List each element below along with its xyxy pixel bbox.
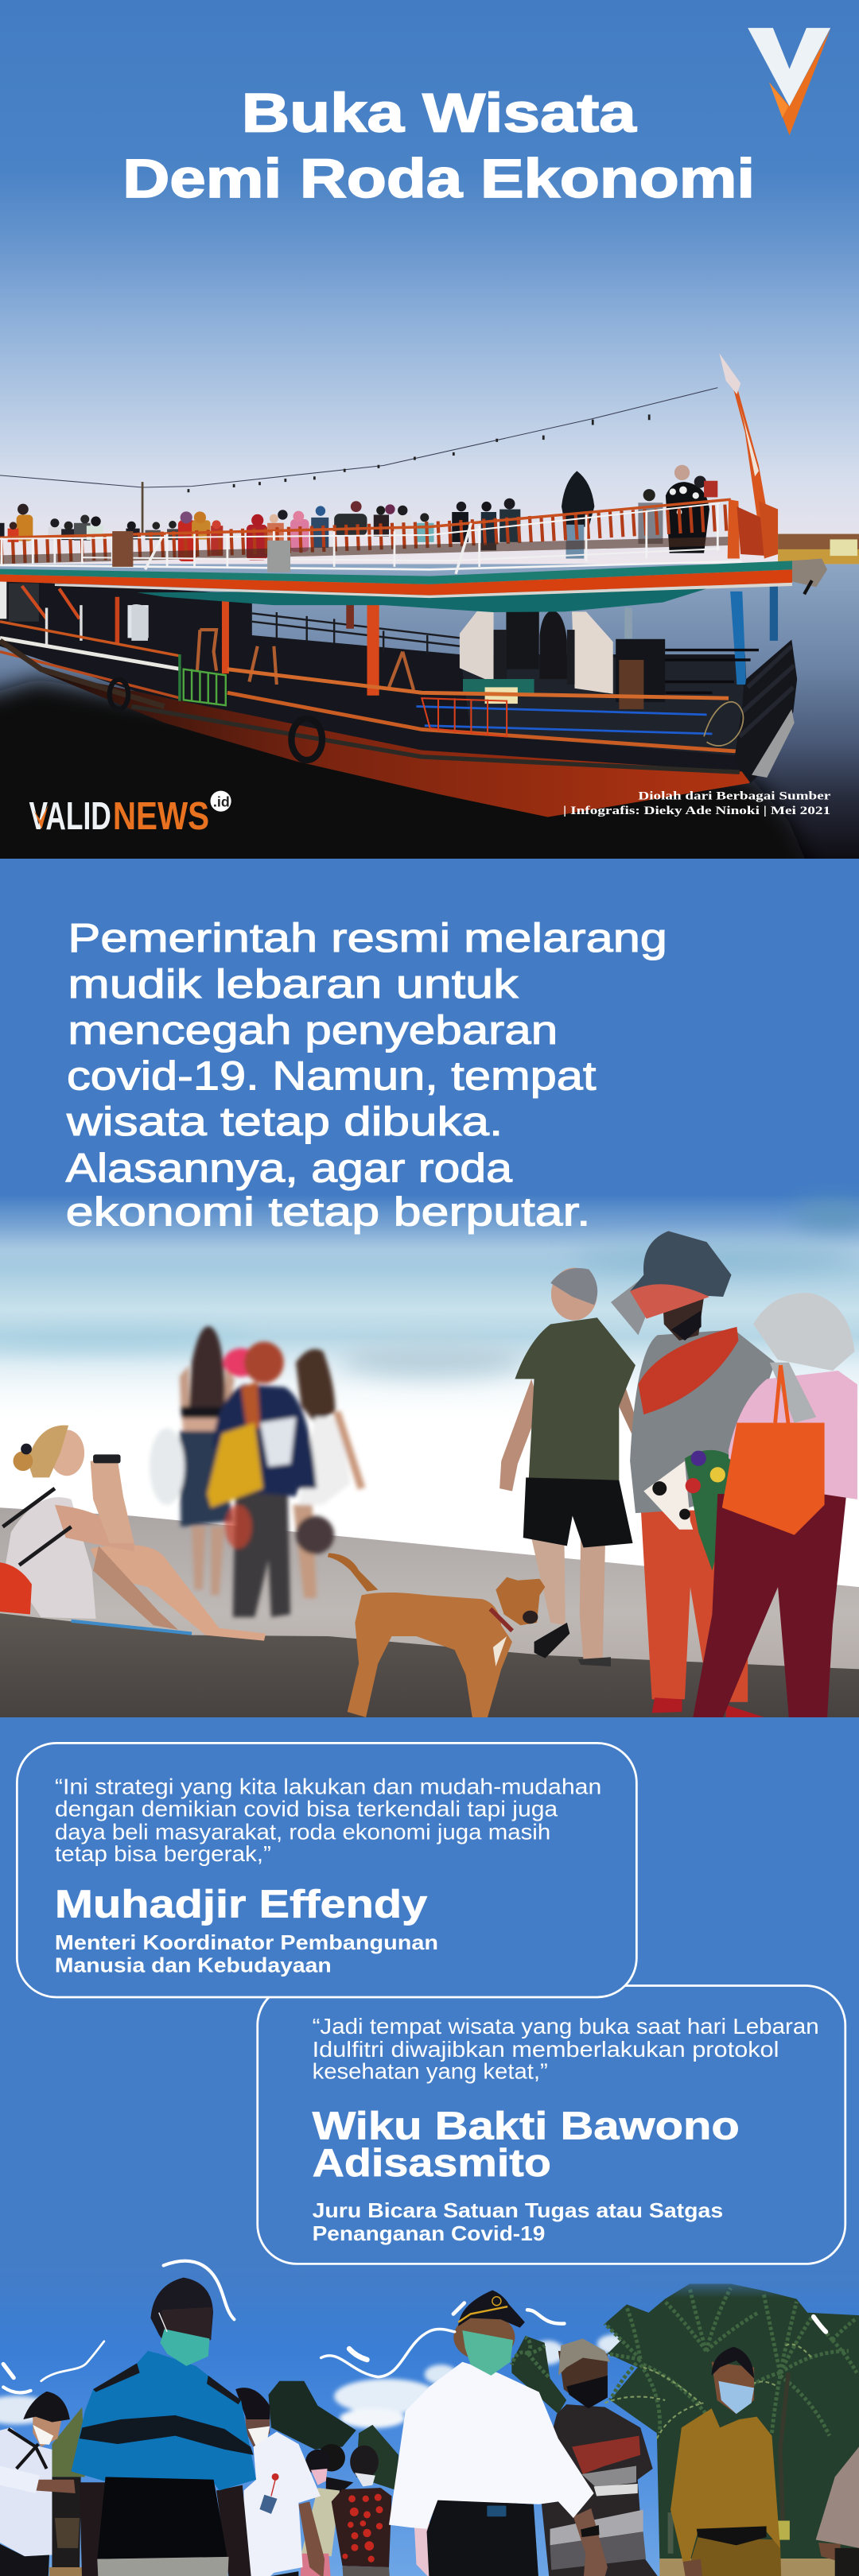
palm trees and ground, right — [511, 2284, 859, 2576]
cabin walls — [460, 608, 665, 709]
intro text: wisata tetap dibuka. — [66, 1099, 503, 1144]
crate and bin on deck — [112, 531, 290, 572]
foreground dark sand — [0, 1613, 859, 1717]
lower deck railings — [0, 622, 740, 772]
source credit: | Infografis: Dieky Ade Ninoki | Mei 2021 — [563, 804, 830, 817]
intro text: mencegah penyebaran — [68, 1007, 558, 1053]
source credit — [564, 791, 830, 817]
quote card: Muhadjir Effendy: Menteri Koordinator Pembangunan — [55, 1932, 438, 1954]
quote card: Wiku Bakti Bawono Adisasmito: Wiku Bakti Bawono — [313, 2103, 740, 2147]
title: Buka Wisata — [242, 82, 637, 143]
stern dark rails — [665, 650, 759, 692]
beach sand — [0, 1507, 859, 1670]
roof deck — [0, 559, 827, 598]
panel: quotes with officials photo — [0, 1717, 859, 2576]
man in khaki uniform with blue mask — [670, 2347, 782, 2576]
sea and sky gradient — [0, 1200, 859, 1587]
logo: Validnews: .id — [213, 794, 230, 810]
roof awning — [137, 588, 707, 612]
panel: intro with beach photo — [0, 859, 859, 1717]
palm top fade — [630, 2271, 859, 2298]
hull — [38, 671, 751, 817]
bow hull — [704, 639, 797, 783]
sky background — [0, 177, 859, 564]
intro text: covid-19. Namun, tempat — [67, 1053, 596, 1099]
bow corner railing — [728, 499, 778, 559]
quote card: Wiku Bakti Bawono Adisasmito — [258, 1986, 845, 2264]
chairs and posts — [115, 586, 778, 696]
children in background — [300, 2444, 430, 2576]
logo: Validnews: VALID — [29, 793, 111, 838]
officer at right edge — [816, 2446, 859, 2576]
quote card: Muhadjir Effendy: tetap bisa bergerak,” — [55, 1841, 271, 1866]
woman sitting on sand — [0, 1426, 266, 1641]
far shore — [778, 534, 859, 564]
quote card: Muhadjir Effendy: Muhadjir Effendy — [55, 1881, 428, 1926]
quote card: Wiku Bakti Bawono Adisasmito: “Jadi tempat wisata yang buka saat hari Lebaran — [313, 2014, 819, 2039]
passengers on upper deck — [0, 465, 717, 561]
man with striped polo and black mask — [539, 2338, 665, 2576]
quote card: Wiku Bakti Bawono Adisasmito: Idulfitri diwajibkan memberlakukan protokol — [313, 2037, 779, 2062]
upper deck railing — [0, 499, 742, 574]
quote card: Muhadjir Effendy: “Ini strategi yang kita lakukan dan mudah-mudahan — [55, 1774, 601, 1798]
intro text: Pemerintah resmi melarang — [68, 915, 667, 960]
intro text — [66, 915, 667, 1234]
intro text: ekonomi tetap berputar. — [66, 1189, 591, 1234]
logo: Validnews — [29, 790, 231, 830]
quote card: Muhadjir Effendy: Manusia dan Kebudayaan — [55, 1954, 332, 1977]
title — [126, 91, 751, 199]
intro text: mudik lebaran untuk — [68, 961, 519, 1007]
logo: V mark — [748, 28, 830, 135]
logo: Validnews: NEWS — [113, 793, 209, 838]
man with cap and white shirt — [389, 2290, 608, 2576]
river water — [0, 564, 859, 859]
intro text: Alasannya, agar roda — [66, 1145, 513, 1190]
brown dog — [328, 1553, 545, 1717]
title: Demi Roda Ekonomi — [122, 148, 755, 209]
panel: header with boat photo — [0, 0, 859, 898]
blurred walkers in background — [150, 1326, 362, 1617]
clouds — [0, 2334, 630, 2428]
quote card: Wiku Bakti Bawono Adisasmito: Juru Bicara Satuan Tugas atau Satgas — [313, 2200, 723, 2222]
quote card: Wiku Bakti Bawono Adisasmito: kesehatan yang ketat,” — [313, 2059, 548, 2084]
quote card: Wiku Bakti Bawono Adisasmito: Penanganan Covid-19 — [313, 2223, 545, 2245]
quote card: Muhadjir Effendy: dengan demikian covid bisa terkendali tapi juga — [55, 1797, 558, 1821]
breaking waves — [0, 1203, 859, 1377]
dark water in boat shadow — [0, 663, 807, 859]
decorative squiggles — [3, 2261, 826, 2392]
background small palms and foliage, left — [49, 2381, 398, 2576]
man in striped shirt with teal mask — [72, 2278, 256, 2576]
lower deck of boat — [0, 580, 751, 772]
quote card: Wiku Bakti Bawono Adisasmito: Adisasmito — [313, 2140, 551, 2185]
vendor woman with hat — [611, 1231, 775, 1717]
panel background — [0, 1717, 859, 2576]
source credit: Diolah dari Berbagai Sumber — [638, 789, 831, 803]
mast — [719, 353, 768, 518]
left man in white shirt — [0, 2392, 76, 2576]
quote card: Muhadjir Effendy: daya beli masyarakat, roda ekonomi juga masih — [55, 1820, 550, 1845]
quote card: Muhadjir Effendy — [17, 1743, 636, 1997]
man with lanyard — [235, 2388, 325, 2576]
man in olive shirt — [499, 1268, 641, 1666]
woman with orange bag — [693, 1293, 857, 1717]
string lights and pole — [0, 388, 717, 534]
tyres — [110, 680, 322, 760]
